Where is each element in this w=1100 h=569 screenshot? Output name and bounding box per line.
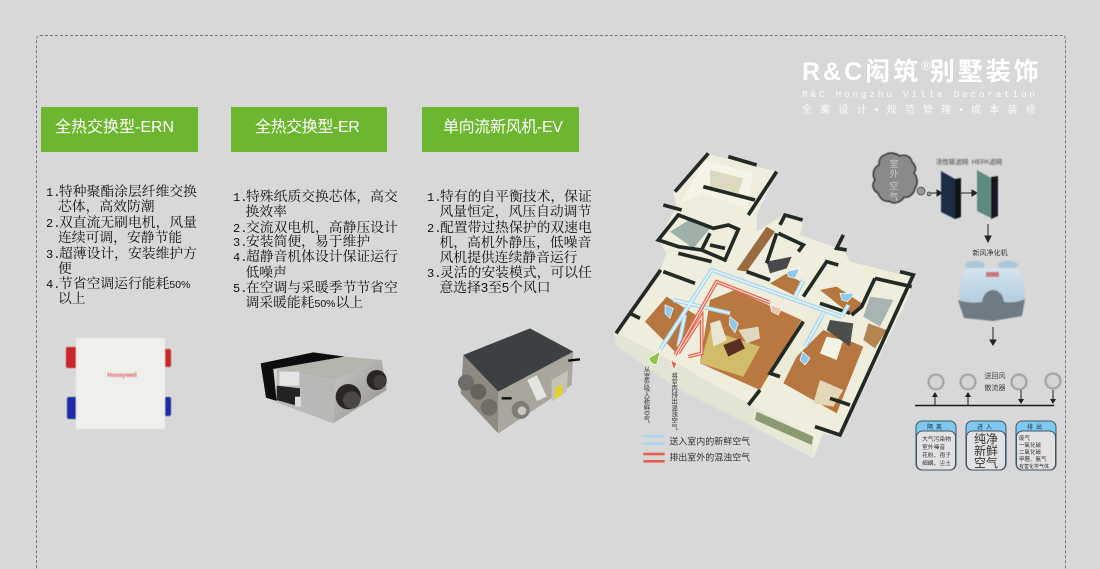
feature list: ER: 特殊纸质交换芯体，高交 (246, 185, 398, 205)
feature list: EV: 风量恒定，风压自动调节 (440, 200, 591, 220)
feature list: ER: 交流双电机，高静压设计 (246, 216, 398, 236)
icon: outdoor air cloud: 空 (889, 180, 899, 191)
feature list: ERN (46, 180, 197, 307)
duct callouts: 从室外吸入新鲜空气 (642, 366, 650, 423)
feature list: ER: 4. (233, 251, 247, 265)
logo: R&C brand (802, 58, 1044, 116)
exhaust ducts (red) (675, 282, 770, 357)
duct callouts: 将室内排出混浊空气 (670, 371, 677, 430)
brand name: R&C闳筑®别墅装饰 (802, 58, 1042, 86)
brand english subtitle: R&C Hongzhu Villa Decoration (802, 89, 1038, 100)
feature list: ERN: 超薄设计，安装维护方 (59, 242, 197, 262)
walls (616, 153, 913, 435)
carbon filter (936, 157, 968, 219)
feature list: ER: 在空调与采暖季节节省空 (246, 276, 398, 296)
arrow: filter to purifier (985, 224, 991, 242)
feature list: ER: 1. (233, 191, 247, 205)
feature list: ERN: 4. (46, 278, 60, 292)
info box: exhaust out: 排出 (1027, 423, 1045, 431)
feature list: EV: 风机提供连续静音运行 (440, 246, 577, 266)
HEPA filter: HEPA滤网 (972, 157, 1002, 166)
info box: fresh air in (966, 421, 1006, 470)
feature list: ERN: 节省空调运行能耗50% (59, 272, 190, 292)
info box: fresh air in: 纯净 (974, 432, 998, 446)
feature list: EV: 灵活的安装模式，可以任 (440, 261, 592, 281)
info box: blocked: 大气污染物 (922, 435, 951, 443)
feature list: ERN: 2. (46, 217, 60, 231)
info box: fresh air in: 空气 (974, 455, 998, 470)
feature list: EV (427, 185, 592, 296)
heading: ER (231, 107, 387, 152)
label: purifier: 新风净化机 (972, 248, 1008, 257)
feature list: ERN: 芯体，高效防潮 (58, 195, 155, 215)
feature list: ER: 安装简便，易于维护 (246, 230, 370, 250)
feature list: EV: 特有的自平衡技术，保证 (440, 185, 592, 205)
info box: fresh air in: 进入 (977, 423, 995, 431)
feature list: ER: 低噪声 (246, 261, 287, 281)
icon: outdoor air cloud: 室 (889, 158, 899, 169)
feature list: ER: 超静音机体设计保证运行 (246, 245, 398, 265)
duct legend (643, 435, 750, 463)
feature list: ER: 换效率 (246, 200, 287, 220)
info box: blocked: 花粉、孢子 (922, 451, 951, 459)
info box: blocked: 室外噪音 (922, 443, 945, 451)
feature list: ERN: 特种聚酯涂层纤维交换 (59, 180, 197, 200)
info box: exhaust out: 甲醛、氨气 (1019, 455, 1047, 463)
feature list: ERN: 便 (58, 257, 72, 277)
feature list: EV: 2. (427, 222, 441, 236)
info box: exhaust out: 一氧化碳 (1019, 441, 1042, 449)
vents diagram (915, 371, 1060, 406)
icon: fresh air purifier (958, 261, 1025, 321)
feature list: ERN: 以上 (58, 287, 86, 307)
feature list: ERN: 3. (46, 248, 60, 262)
fresh-air ducts (blue) (660, 270, 848, 357)
info box: fresh air in: 新鲜 (974, 443, 998, 458)
feature list: ER (233, 185, 398, 311)
heading: ERN: 全热交换型-ERN (55, 119, 174, 136)
icon: outdoor air cloud: 外 (889, 168, 899, 179)
feature list: EV: 3. (427, 267, 441, 281)
icon: outdoor air cloud: 气 (889, 191, 899, 202)
heading: ERN (41, 107, 198, 152)
product photo: Honeywell ERN unit: Honeywell (107, 373, 137, 379)
info box: blocked: 细螨、尘土 (922, 459, 951, 467)
feature list: EV: 1. (427, 191, 441, 205)
carbon filter: 活性碳滤网 (936, 157, 968, 166)
feature list: ERN: 双直流无刷电机，风量 (59, 211, 197, 231)
heading: EV (422, 107, 579, 152)
product photo: Honeywell ERN unit (66, 338, 171, 429)
product photo: ER unit (261, 352, 387, 423)
feature list: EV: 机，高机外静压，低噪音 (440, 231, 591, 251)
duct legend: 送入室内的新鲜空气 (669, 436, 750, 447)
info box: exhaust out (1016, 421, 1056, 470)
info box: blocked (916, 421, 956, 470)
info box: exhaust out: 废气 (1019, 434, 1031, 442)
feature list: EV: 意选择3至5个风口 (440, 276, 551, 296)
feature list: EV: 配置带过热保护的双速电 (440, 216, 592, 236)
arrow: carbon to HEPA filter (961, 190, 977, 196)
apartment shell (614, 153, 914, 458)
feature list: ER: 2. (233, 222, 247, 236)
feature list: ERN: 连续可调，安静节能 (58, 226, 182, 246)
feature list: ER: 3. (233, 236, 247, 250)
feature list: ER: 5. (233, 282, 247, 296)
brand slogan: 全案设计•规范管理•成本装修 (802, 105, 1044, 116)
info box: blocked: 隔离 (927, 423, 945, 431)
vents diagram: 散流器 (984, 383, 1006, 392)
HEPA filter (972, 157, 1002, 219)
feature list: ER: 调采暖能耗50%以上 (246, 291, 363, 311)
duct callouts (642, 366, 677, 430)
icon: outdoor air cloud (873, 153, 931, 203)
info box: exhaust out: 二氧化碳 (1019, 448, 1042, 456)
duct legend: 排出室外的混浊空气 (669, 452, 750, 463)
arrow: cloud to carbon filter (931, 190, 942, 196)
feature list: ERN: 1. (46, 186, 60, 200)
info box: exhaust out: 有害化学气体 (1019, 463, 1049, 470)
arrow: purifier to vents (990, 327, 996, 345)
heading: ER: 全热交换型-ER (255, 119, 359, 136)
floor plan: 3D apartment cutaway with ducts (614, 153, 914, 463)
product photo: EV unit (458, 328, 580, 433)
heading: EV: 单向流新风机-EV (443, 119, 563, 136)
airflow arrows (648, 268, 855, 370)
vents diagram: 送回风 (984, 371, 1006, 380)
